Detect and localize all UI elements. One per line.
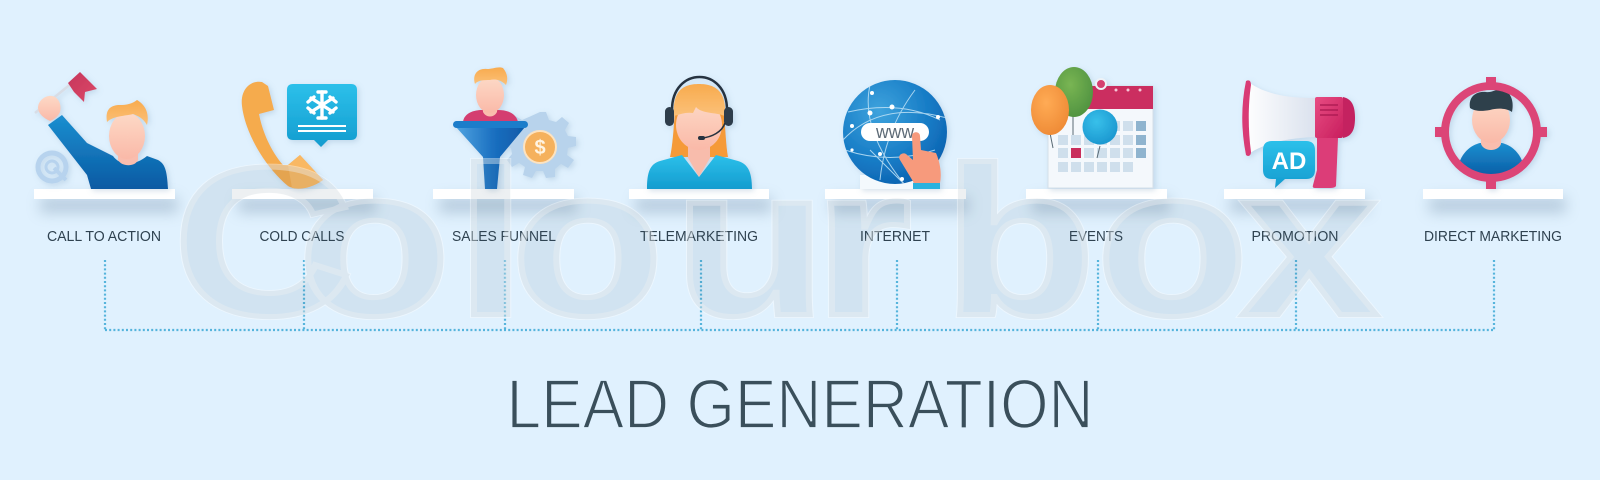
label: telemarketing: TELEMARKETING	[640, 228, 758, 245]
icon: call to action person with flag	[35, 72, 168, 189]
labels row	[47, 228, 1562, 245]
watermark: Colourbox: Colourbox	[173, 124, 1379, 361]
icon: internet globe with www and pointing hand	[843, 80, 947, 189]
infographic: lead generation	[34, 67, 1570, 428]
icon: promotion megaphone with AD bubble: AD	[1272, 148, 1306, 175]
label: events: EVENTS	[1069, 228, 1123, 245]
label: cold calls: COLD CALLS	[260, 228, 344, 245]
label: direct marketing: DIRECT MARKETING	[1424, 228, 1562, 245]
icon: telemarketing woman with headset	[647, 77, 752, 189]
icon: internet globe with www and pointing hand: www	[875, 122, 915, 142]
icon: sales funnel with person and gear	[453, 67, 576, 189]
label: promotion: PROMOTION	[1252, 228, 1338, 245]
label: internet: INTERNET	[860, 228, 930, 245]
icon: events calendar with balloons	[1031, 67, 1153, 188]
icon: promotion megaphone with AD bubble	[1242, 80, 1355, 188]
title: LEAD GENERATION	[506, 365, 1094, 443]
label: sales funnel: SALES FUNNEL	[452, 228, 556, 245]
watermark: Colourbox: Colourbox	[173, 124, 1379, 361]
shelves row	[34, 189, 1566, 213]
icon: cold calls phone and snowflake bubble	[242, 82, 357, 189]
dotted connector lines	[105, 260, 1494, 330]
icon: sales funnel with person and gear: $	[534, 137, 546, 159]
icon: direct marketing target with person	[1435, 77, 1547, 189]
label: call to action: CALL TO ACTION	[47, 228, 161, 245]
